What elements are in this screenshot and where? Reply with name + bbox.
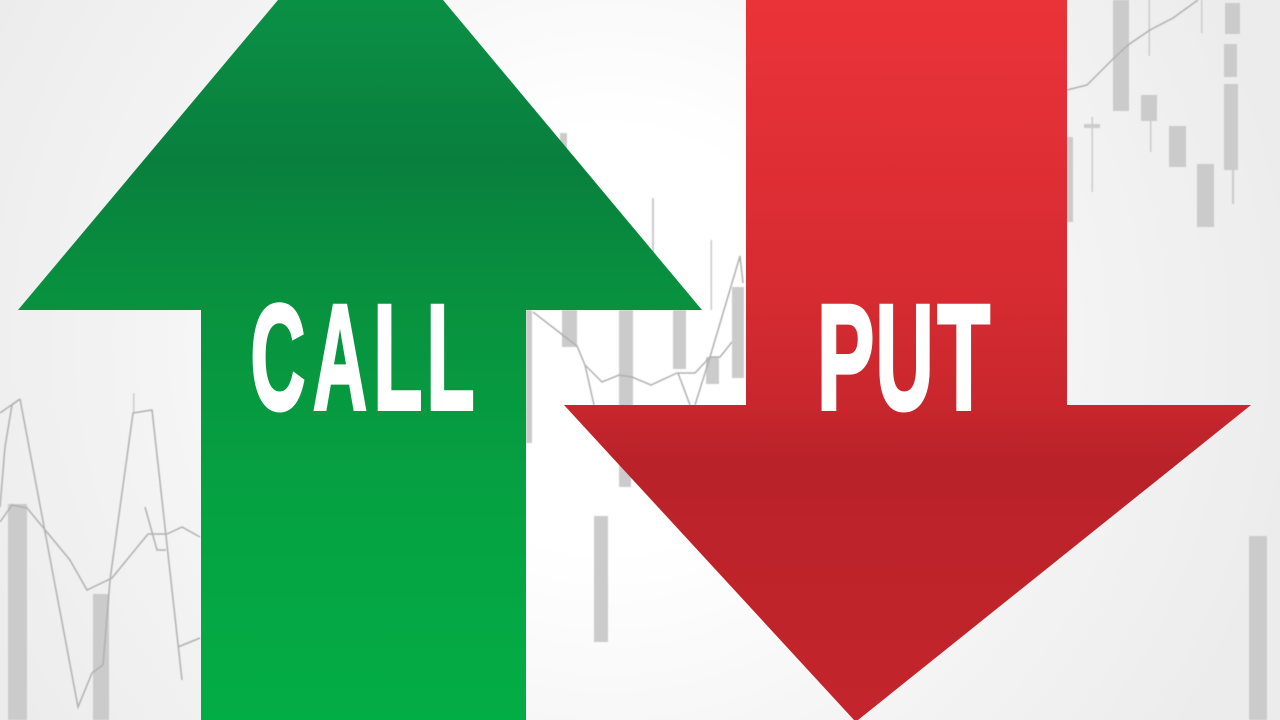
label: PUT: P <box>817 273 874 441</box>
label: PUT: T <box>937 273 990 441</box>
label: CALL <box>250 273 474 441</box>
label: CALL: C <box>250 273 305 441</box>
label: CALL: L <box>373 273 422 441</box>
label: PUT <box>817 273 990 441</box>
label: PUT: U <box>876 273 934 441</box>
label: CALL: L <box>426 273 474 441</box>
label: CALL: A <box>313 273 367 441</box>
red down arrow <box>564 0 1251 720</box>
green up arrow <box>18 0 702 720</box>
